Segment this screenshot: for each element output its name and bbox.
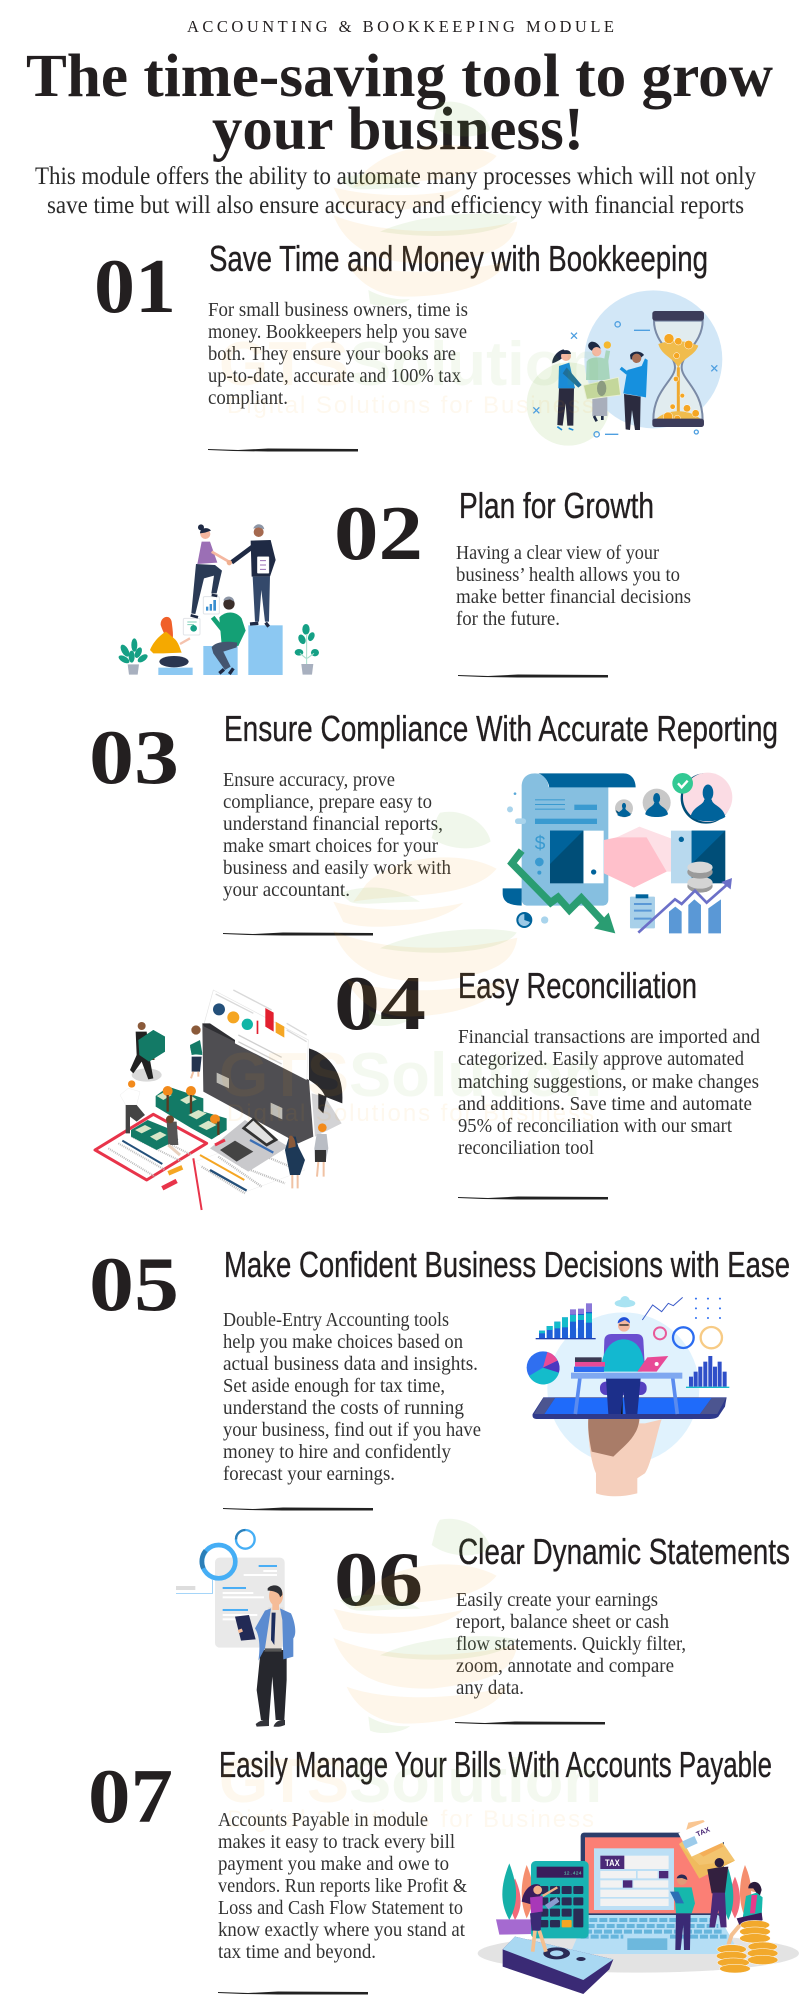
- body text 07: Loss and Cash Flow Statement to: [218, 1898, 463, 1919]
- body text 03: make smart choices for your: [223, 836, 438, 857]
- body text 02: make better financial decisions: [456, 587, 691, 608]
- panel: 04 easy reconciliation: [95, 960, 760, 1210]
- panel: 03 ensure compliance: [89, 708, 778, 936]
- watermark: GTS Solution bottom: GTSSolution: [219, 1747, 602, 1816]
- body text 01: [208, 300, 468, 409]
- body text 04: Financial transactions are imported and: [458, 1027, 760, 1048]
- watermark: GTS Solution middle: Digital Solutions for Business: [227, 1100, 594, 1127]
- body text 01: money. Bookkeepers help you save: [208, 322, 467, 343]
- intro text: save time but will also ensure accuracy and efficiency with financial reports: [47, 192, 744, 219]
- title: your business!: [212, 96, 584, 163]
- number 06: 06: [334, 1536, 423, 1622]
- body text 06: flow statements. Quickly filter,: [456, 1634, 686, 1655]
- body text 05: help you make choices based on: [223, 1332, 463, 1353]
- illustration: tax laptop, calculator and coins: [478, 1817, 799, 1994]
- body text 04: and additions. Save time and automate: [458, 1094, 752, 1115]
- body text 06: Easily create your earnings: [456, 1590, 658, 1611]
- number 07: 07: [88, 1753, 173, 1839]
- number 02: 02: [334, 490, 423, 576]
- body text 07: tax time and beyond.: [218, 1942, 376, 1963]
- panel: 02 plan for growth: [117, 485, 691, 678]
- illustration: compliance handshake: [503, 773, 732, 933]
- body text 03: compliance, prepare easy to: [223, 792, 432, 813]
- body text 05: actual business data and insights.: [223, 1354, 478, 1375]
- intro text: [35, 163, 756, 219]
- panel: 06 clear dynamic statements: [176, 1530, 790, 1727]
- watermark: GTS Solution bottom: Digital Solutions for Business: [227, 1806, 594, 1833]
- body text 07: vendors. Run reports like Profit &: [218, 1876, 467, 1897]
- body text 06: [456, 1590, 686, 1699]
- body text 04: reconciliation tool: [458, 1138, 595, 1159]
- body text 07: know exactly where you stand at: [218, 1920, 466, 1941]
- intro text: This module offers the ability to automate many processes which will not only: [35, 163, 756, 190]
- body text 03: your accountant.: [223, 880, 350, 901]
- body text 07: [218, 1810, 467, 1963]
- body text 04: 95% of reconciliation with our smart: [458, 1116, 733, 1137]
- illustration: businessman with report: [176, 1530, 295, 1727]
- title: The time-saving tool to grow: [26, 43, 773, 110]
- panel: 05 confident decisions: [89, 1241, 790, 1510]
- body text 04: categorized. Easily approve automated: [458, 1049, 744, 1070]
- body text 02: business’ health allows you to: [456, 565, 680, 586]
- body text 05: money to hire and confidently: [223, 1442, 451, 1463]
- body text 01: For small business owners, time is: [208, 300, 468, 321]
- body text 03: Ensure accuracy, prove: [223, 770, 395, 791]
- number 01: 01: [94, 243, 176, 329]
- body text 01: both. They ensure your books are: [208, 344, 456, 365]
- body text 07: payment you make and owe to: [218, 1854, 449, 1875]
- body text 06: any data.: [456, 1678, 524, 1699]
- body text 03: [223, 770, 451, 901]
- body text 05: your business, find out if you have: [223, 1420, 481, 1441]
- number 03: 03: [89, 714, 179, 800]
- number 04: 04: [334, 960, 426, 1046]
- body text 07: Accounts Payable in module: [218, 1810, 428, 1831]
- body text 05: [223, 1310, 481, 1485]
- body text 06: report, balance sheet or cash: [456, 1612, 669, 1633]
- body text 02: Having a clear view of your: [456, 543, 659, 564]
- illustration: isometric accounting desk: [95, 990, 342, 1210]
- illustration: team climbing blocks: [117, 524, 319, 675]
- body text 02: for the future.: [456, 609, 560, 630]
- body text 01: compliant.: [208, 388, 288, 409]
- body text 06: zoom, annotate and compare: [456, 1656, 674, 1677]
- body text 04: matching suggestions, or make changes: [458, 1072, 759, 1093]
- body text 05: Double-Entry Accounting tools: [223, 1310, 449, 1331]
- watermark: GTS Solution top: Digital Solutions for Business: [227, 392, 594, 419]
- illustration: tax laptop, calculator and coins: 12.424: [564, 1870, 582, 1876]
- body text 05: understand the costs of running: [223, 1398, 464, 1419]
- panel: 07 manage your bills: [88, 1744, 799, 1994]
- body text 05: forecast your earnings.: [223, 1464, 395, 1485]
- watermark: GTS Solution top: GTSSolution: [219, 330, 602, 399]
- watermark: GTS Solution top: [219, 102, 602, 419]
- heading 04: Easy Reconciliation: [458, 965, 697, 1006]
- illustration: people with hourglass: [527, 290, 722, 446]
- title: [26, 43, 773, 163]
- body text 07: makes it easy to track every bill: [218, 1832, 456, 1853]
- panel: 01 save time and money: [94, 238, 722, 452]
- heading 02: Plan for Growth: [459, 485, 654, 526]
- watermark: GTS Solution middle: [219, 812, 602, 1127]
- watermark: GTS Solution middle: GTSSolution: [219, 1041, 602, 1110]
- body text 01: up-to-date, accurate and 100% tax: [208, 366, 461, 387]
- body text 02: [456, 543, 691, 630]
- body text 05: Set aside enough for tax time,: [223, 1376, 445, 1397]
- illustration: compliance handshake: $: [535, 833, 546, 854]
- eyebrow heading: ACCOUNTING & BOOKKEEPING MODULE: [187, 17, 614, 36]
- illustration: tax laptop, calculator and coins: TAX: [605, 1858, 620, 1868]
- number 05: 05: [89, 1241, 179, 1327]
- illustration: tax laptop, calculator and coins: TAX: [695, 1825, 711, 1839]
- illustration: analyst on a tablet held by hand: [527, 1296, 729, 1496]
- watermark: GTS Solution bottom: [219, 1519, 602, 1833]
- body text 04: [458, 1027, 760, 1159]
- body text 03: understand financial reports,: [223, 814, 443, 835]
- body text 03: business and easily work with: [223, 858, 451, 879]
